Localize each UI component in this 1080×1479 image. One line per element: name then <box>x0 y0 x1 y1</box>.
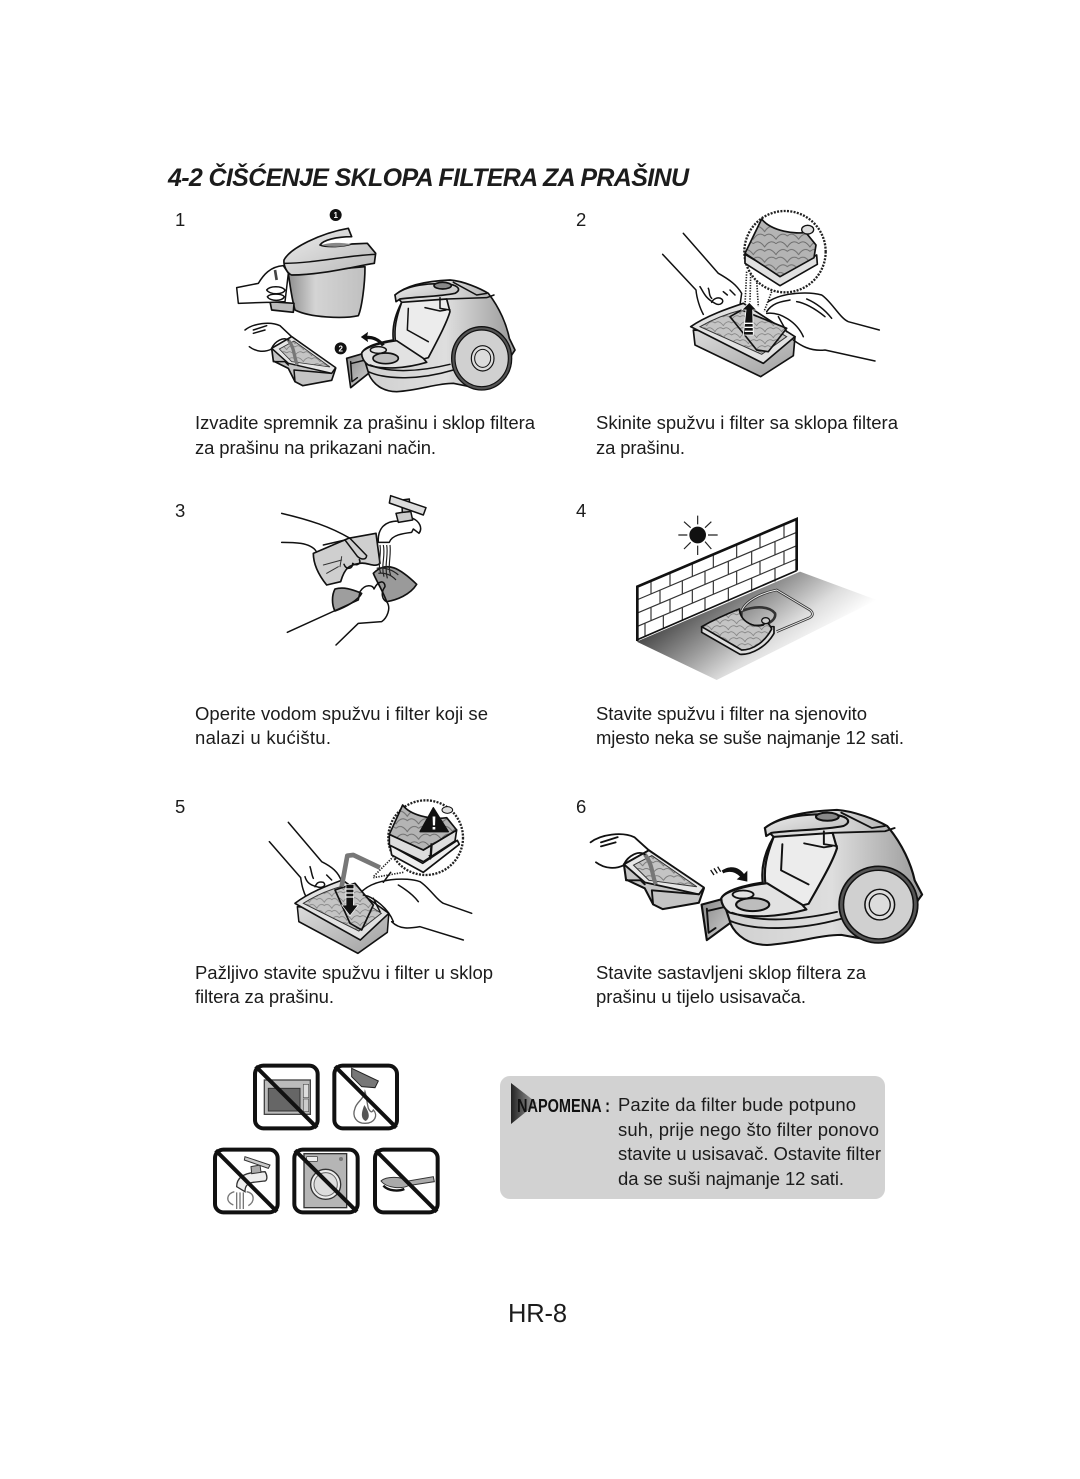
note text: da se suši najmanje 12 sati. <box>618 1168 844 1189</box>
step 4 text <box>596 703 904 748</box>
sponge <box>702 609 774 654</box>
left hand <box>663 233 742 314</box>
icon: no brush <box>375 1150 438 1212</box>
dotted leader lines <box>373 858 403 878</box>
step 5 text: filtera za prašinu. <box>195 986 334 1007</box>
step 4 text: mjesto neka se suše najmanje 12 sati. <box>596 727 904 748</box>
vacuum cleaner <box>702 810 922 945</box>
step 4 text: Stavite spužvu i filter na sjenovito <box>596 703 867 724</box>
icon: no running water <box>215 1150 278 1212</box>
sponge being lifted <box>730 310 787 352</box>
icon: no microwave <box>255 1066 318 1128</box>
note text <box>618 1094 881 1189</box>
page number: HR-8 <box>508 1300 567 1328</box>
step 1 text: za prašinu na prikazani način. <box>195 437 436 458</box>
step 6 text: prašinu u tijelo usisavača. <box>596 986 806 1007</box>
step 1 text <box>195 412 536 458</box>
step 3 text: nalazi u kućištu. <box>195 727 331 748</box>
note text: suh, prije nego što filter ponovo <box>618 1119 879 1140</box>
title: 4-2 ČIŠĆENJE SKLOPA FILTERA ZA PRAŠINU <box>167 162 690 192</box>
filter tray <box>691 303 795 377</box>
filter tray with hand <box>591 834 704 909</box>
warning triangle: ! <box>431 812 437 833</box>
insert arrow <box>711 867 747 882</box>
step 3 number: 3 <box>175 500 185 521</box>
left hand <box>269 822 342 897</box>
step 4 number: 4 <box>576 500 586 521</box>
illustration: step 1 removing dust bin and filter <box>237 209 515 392</box>
step 6 text: Stavite sastavljeni sklop filtera za <box>596 962 867 983</box>
illustration: step 3 washing under tap <box>282 496 426 645</box>
step 6 text <box>596 962 867 1007</box>
step 2 text: Skinite spužvu i filter sa sklopa filtera <box>596 412 899 433</box>
magnified sponge callout <box>388 800 463 875</box>
lower hand <box>287 582 389 645</box>
magnified sponge callout <box>744 211 826 292</box>
dotted leader lines <box>745 272 772 312</box>
step 3 text <box>195 703 488 748</box>
circled number 2 <box>335 342 347 354</box>
sponge being inserted <box>335 883 373 930</box>
step 3 text: Operite vodom spužvu i filter koji se <box>195 703 488 724</box>
cloth filter <box>313 533 380 585</box>
step 1 text: Izvadite spremnik za prašinu i sklop filtera <box>195 412 536 433</box>
right hand <box>767 293 879 361</box>
illustration: step 2 removing sponge <box>663 211 879 377</box>
icon: note triangle <box>511 1083 537 1124</box>
warning triangle <box>420 808 448 833</box>
circled number 2: 2 <box>338 344 343 353</box>
step 5 number: 5 <box>175 796 185 817</box>
step 5 text <box>195 962 493 1007</box>
filter frame <box>741 590 812 632</box>
circled number 1: 1 <box>333 211 338 220</box>
filter tray with hand <box>245 323 336 386</box>
note text: Pazite da filter bude potpuno <box>618 1094 856 1115</box>
right hand <box>362 872 472 940</box>
step 2 number: 2 <box>576 209 586 230</box>
vacuum cleaner <box>347 280 515 392</box>
hand holding bin <box>237 266 288 303</box>
prohibition icons <box>215 1066 438 1212</box>
illustration: step 4 drying beside wall <box>637 516 877 680</box>
circled number 1 <box>330 209 342 221</box>
tap <box>378 496 426 542</box>
frame held above tray <box>342 855 380 887</box>
note text: stavite u usisavač. Ostavite filter <box>618 1143 881 1164</box>
wet filter base <box>373 567 417 602</box>
sun <box>678 516 718 555</box>
floor shadow <box>637 572 877 680</box>
step 5 text: Pažljivo stavite spužvu i filter u sklop <box>195 962 493 983</box>
up arrow <box>742 302 757 335</box>
step 6 number: 6 <box>576 796 586 817</box>
icon: no fire <box>334 1066 397 1128</box>
icon: no washing machine <box>294 1150 358 1212</box>
water stream <box>377 545 398 580</box>
illustration: step 5 inserting sponge <box>269 800 472 953</box>
illustration: step 6 reinserting filter <box>591 810 922 945</box>
upper hand <box>282 513 367 568</box>
note label: NAPOMENA : <box>517 1096 610 1116</box>
dust bin <box>270 228 376 317</box>
down arrow <box>342 884 358 916</box>
sponge <box>332 588 362 611</box>
brick wall <box>637 519 797 641</box>
lift arrow <box>362 333 384 346</box>
note panel <box>500 1076 885 1199</box>
step 2 text <box>596 412 899 458</box>
step 1 number: 1 <box>175 209 185 230</box>
step 2 text: za prašinu. <box>596 437 685 458</box>
filter tray <box>295 880 389 953</box>
